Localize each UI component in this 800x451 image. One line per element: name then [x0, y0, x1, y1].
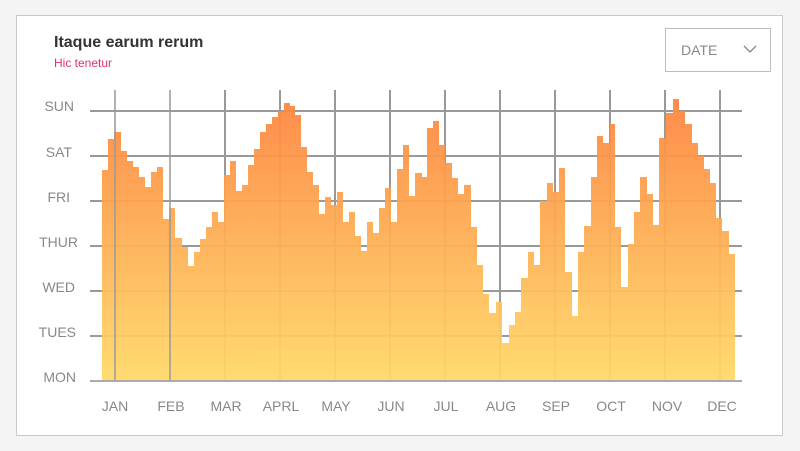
- x axis labels: OCT: [596, 398, 626, 414]
- y axis labels: WED: [42, 279, 75, 295]
- x axis labels: FEB: [157, 398, 185, 414]
- icon: chevron: [744, 46, 756, 53]
- x axis labels: JUL: [434, 398, 459, 414]
- y axis labels: MON: [43, 369, 76, 385]
- x axis labels: JAN: [102, 398, 128, 414]
- title: Itaque earum rerum: [54, 34, 203, 51]
- x axis labels: JUN: [377, 398, 405, 414]
- x axis labels: MAR: [210, 398, 242, 414]
- x axis labels: APRL: [263, 398, 299, 414]
- area series: [102, 99, 735, 381]
- y axis labels: [39, 98, 78, 385]
- x axis labels: DEC: [707, 398, 737, 414]
- y axis labels: SAT: [46, 144, 72, 160]
- x axis labels: [102, 398, 737, 414]
- y axis labels: SUN: [44, 98, 74, 114]
- y axis labels: TUES: [39, 324, 76, 340]
- date dropdown: DATE: [681, 42, 717, 58]
- x axis labels: MAY: [321, 398, 351, 414]
- y axis labels: THUR: [39, 234, 78, 250]
- x axis labels: SEP: [542, 398, 570, 414]
- y axis labels: FRI: [47, 189, 70, 205]
- x axis labels: NOV: [652, 398, 683, 414]
- x axis labels: AUG: [486, 398, 516, 414]
- date dropdown: [665, 28, 771, 72]
- subtitle: Hic tenetur: [54, 56, 112, 70]
